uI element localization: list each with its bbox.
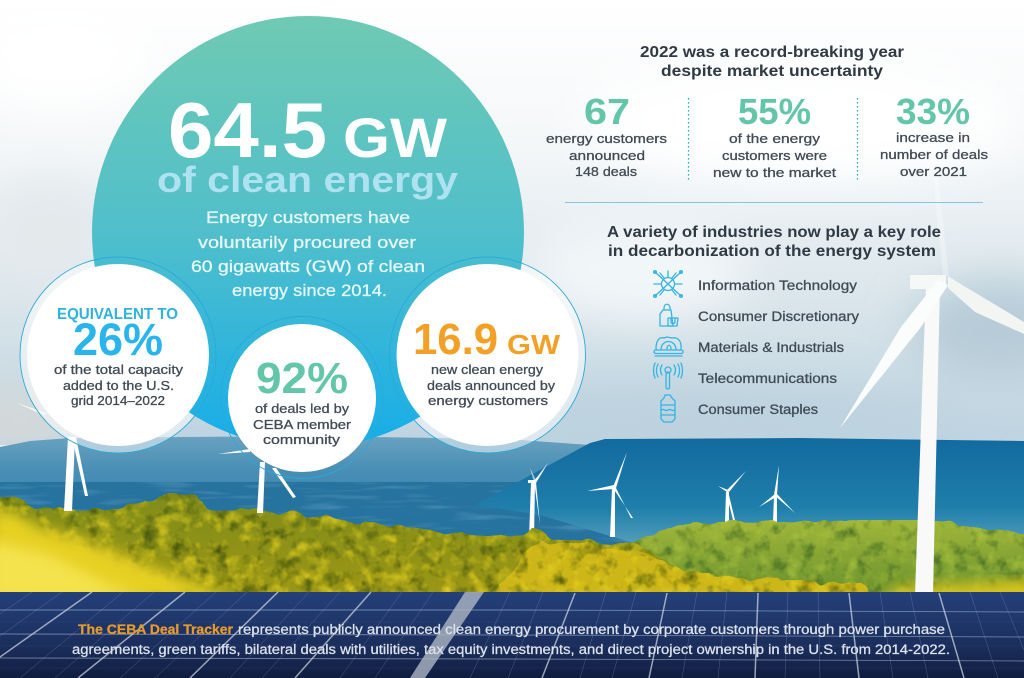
footer text: agreements, green tariffs, bilateral deals with utilities, tax equity investments, and direct project ownership in the U.S. from 2014-2022. [72, 642, 950, 657]
yellow meadow [0, 510, 240, 600]
turbine far 1 [528, 463, 548, 538]
small turbines far [528, 452, 795, 538]
stat: 67: announced [569, 148, 645, 163]
panel: solar array footer [0, 592, 1024, 678]
callout: 92% of deals [221, 316, 383, 478]
description text: 60 gigawatts (GW) of clean [191, 257, 425, 276]
left mountain range [0, 436, 640, 545]
lower-left blade [840, 280, 948, 428]
icon: antenna [654, 363, 682, 389]
caption: energy customers [428, 394, 548, 408]
description text [191, 208, 425, 300]
label: Telecommunications [698, 371, 837, 386]
description text: voluntarily procured over [198, 233, 416, 252]
caption: deals announced by [427, 379, 556, 393]
label: EQUIVALENT TO [57, 306, 178, 323]
footer text: represents publicly announced clean energy procurement by corporate customers through power purchase [238, 622, 945, 637]
stat: 67: 148 deals [575, 164, 638, 179]
heading: variety of industries [607, 224, 941, 260]
cell grid lines [0, 592, 1024, 678]
backdrop bands around callouts [20, 257, 586, 453]
stat: 33%: over 2021 [900, 164, 967, 179]
middle tree line [0, 493, 760, 610]
label: Consumer Staples [698, 402, 818, 417]
stat: 55%: new to the market [713, 165, 836, 180]
icon: gear materials [654, 337, 683, 356]
caption [253, 402, 351, 447]
description text: Energy customers have [206, 208, 410, 227]
stat: 67 [546, 91, 668, 179]
stat [413, 315, 561, 364]
stat: 55%: of the energy [729, 131, 821, 146]
stat: 92% [256, 354, 348, 403]
heading: record-breaking year [640, 44, 904, 80]
reflective band [410, 592, 484, 678]
faint upper blade [922, 60, 949, 276]
stat: 33%: increase in [896, 130, 970, 145]
turbine far 2 [587, 452, 633, 537]
right mountain [475, 438, 1024, 545]
caption: new clean energy [431, 363, 544, 377]
icon: information technology [654, 271, 682, 297]
caption: of deals led by [255, 402, 350, 416]
turbine far 3 [718, 471, 746, 522]
right blade [948, 276, 1024, 334]
stat: 67: 67 [584, 91, 630, 132]
stat: 55%: 55% [738, 91, 811, 132]
horizontal panel rails [0, 610, 1024, 661]
footer text [72, 622, 950, 657]
callout: 26% equivalent [20, 257, 216, 453]
callout: 16.9 GW [390, 257, 586, 453]
label: Materials & Industrials [698, 340, 844, 355]
turbine far 4 [759, 465, 795, 522]
left turbine [17, 403, 88, 511]
stat: 33%: 33% [896, 91, 970, 132]
heading: variety of industries: in decarbonization of the energy system [608, 243, 936, 260]
label: Consumer Discretionary [698, 309, 859, 324]
caption: community [263, 433, 341, 447]
icon: shopping bag [660, 304, 678, 326]
icon: can [661, 395, 675, 422]
stat: 55%: customers were [722, 148, 827, 163]
footer text: The CEBA Deal Tracker [78, 622, 234, 637]
stat: 16.9 [413, 315, 498, 364]
caption [427, 363, 556, 408]
headline: 64.5 GW: 64.5 [168, 86, 327, 174]
yellow trees [480, 540, 880, 610]
middle turbine [218, 449, 296, 513]
sky with clouds [0, 0, 1024, 450]
stat: 33% [880, 91, 989, 179]
nacelle [910, 275, 946, 289]
label: Information Technology [698, 278, 857, 293]
stat: 67: energy customers [546, 131, 668, 146]
caption: of the total capacity [54, 363, 184, 377]
distant valley [0, 482, 640, 552]
heading: variety of industries: A variety of industries now play a key role [607, 224, 941, 241]
stat: 55% [713, 91, 836, 180]
large turbine [840, 60, 1024, 595]
tower [915, 285, 940, 595]
right hill trees [620, 520, 1024, 610]
caption: added to the U.S. [63, 379, 174, 393]
stat: 26% [73, 314, 163, 365]
headline: 64.5 GW: GW [343, 106, 447, 169]
caption: grid 2014–2022 [71, 394, 165, 408]
heading: record-breaking year: 2022 was a record-breaking year [640, 44, 904, 61]
stat: GW [507, 329, 561, 360]
subheadline: of clean energy: of clean energy [157, 159, 458, 200]
headline: 64.5 GW [168, 86, 447, 174]
list: industries [654, 271, 859, 422]
description text: energy since 2014. [232, 281, 387, 300]
stat: 33%: number of deals [880, 147, 989, 162]
caption: CEBA member [253, 418, 351, 432]
caption [54, 363, 184, 408]
heading: record-breaking year: despite market uncertainty [661, 63, 883, 80]
panel: big circle [92, 16, 524, 448]
panel frames [0, 592, 964, 678]
right lower yellow trees [860, 578, 1024, 610]
